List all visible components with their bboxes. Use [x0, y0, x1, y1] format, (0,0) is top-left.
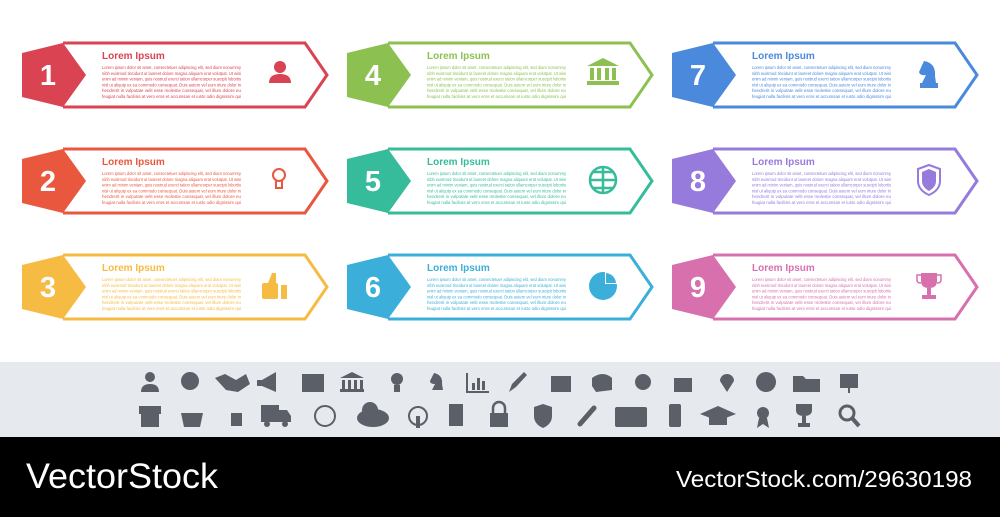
icon strip	[0, 362, 1000, 437]
card 8: 8	[690, 166, 706, 198]
card 6: 6	[365, 272, 381, 304]
card 3: Lorem Ipsum	[102, 263, 165, 274]
card 6	[347, 255, 652, 319]
card 1: Lorem Ipsum	[102, 51, 165, 62]
card 2: Lorem Ipsum	[102, 157, 165, 168]
footer logo: VectorStock	[26, 457, 219, 496]
card 8: Lorem Ipsum	[752, 157, 815, 168]
card 6: Lorem Ipsum	[427, 263, 490, 274]
card 4: Lorem Ipsum	[427, 51, 490, 62]
card 1	[22, 43, 327, 107]
card 5: 5	[365, 166, 381, 198]
background	[0, 0, 1000, 362]
card 2: 2	[40, 166, 56, 198]
card 5	[347, 149, 652, 213]
card 4	[347, 43, 652, 107]
card 7: Lorem Ipsum	[752, 51, 815, 62]
card 9	[672, 255, 977, 319]
card 3: 3	[40, 272, 56, 304]
card 5: Lorem Ipsum	[427, 157, 490, 168]
footer url: VectorStock.com/29630198	[676, 466, 972, 492]
card 9: Lorem Ipsum	[752, 263, 815, 274]
card 7	[672, 43, 977, 107]
card 7: 7	[690, 60, 706, 92]
card 2	[22, 149, 327, 213]
card 8	[672, 149, 977, 213]
card 9: 9	[690, 272, 706, 304]
card 3	[22, 255, 327, 319]
card 4: 4	[365, 60, 381, 92]
card 1: 1	[40, 60, 56, 92]
footer bar	[0, 437, 1000, 517]
